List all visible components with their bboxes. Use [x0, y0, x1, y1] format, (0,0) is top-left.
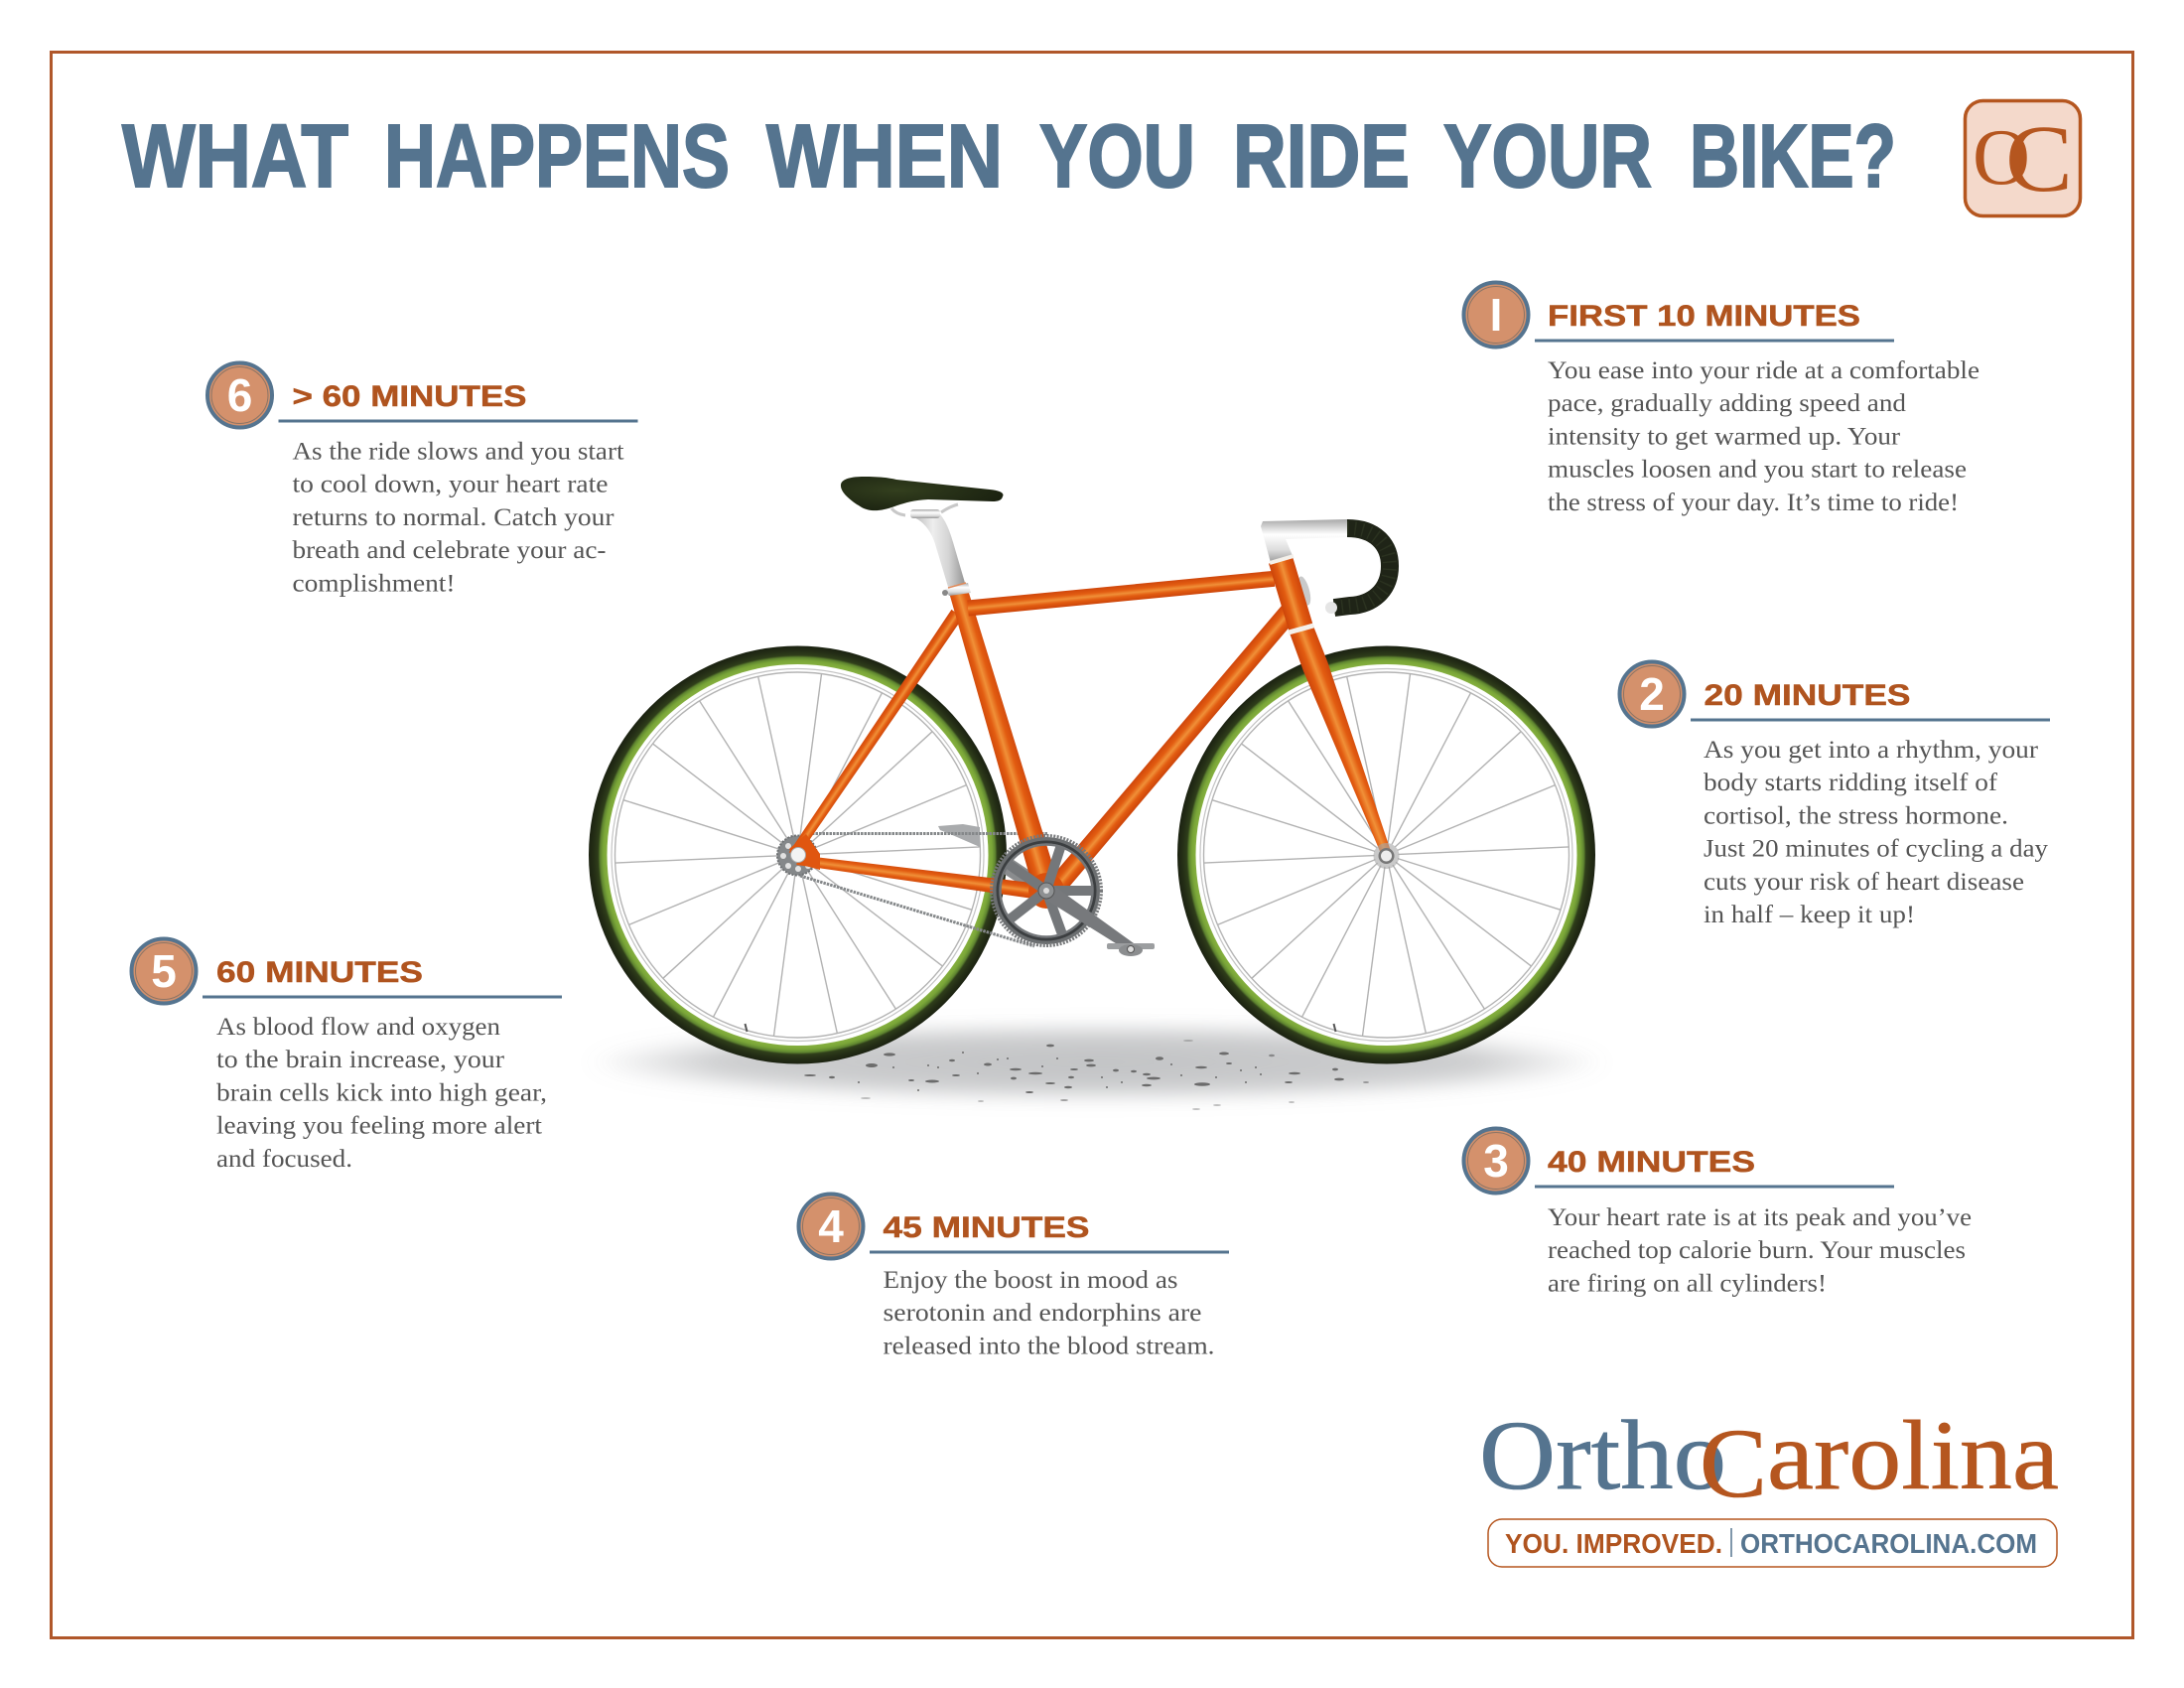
bottom bracket	[1028, 873, 1064, 909]
title: WHAT	[122, 107, 348, 207]
title: BIKE?	[1690, 107, 1896, 207]
chainring	[991, 836, 1102, 945]
body text: to cool down, your heart rate	[292, 472, 608, 498]
panel: step 4	[798, 1194, 1229, 1359]
body text: breath and celebrate your ac-	[292, 537, 606, 564]
heading: 20 MINUTES	[1704, 679, 1910, 712]
body text	[1548, 1204, 1972, 1297]
upper pedal and far crank	[938, 824, 1046, 899]
badge 5: 5	[151, 945, 177, 997]
body text: to the brain increase, your	[216, 1047, 505, 1073]
badge 2: 2	[1639, 668, 1665, 720]
panel: step 1	[1463, 282, 1979, 516]
body text: muscles loosen and you start to release	[1548, 457, 1967, 484]
lower pedal	[1107, 943, 1155, 956]
heading: 60 MINUTES	[216, 956, 423, 989]
body text: body starts ridding itself of	[1704, 770, 1998, 796]
chain	[800, 834, 1047, 946]
tagline pill: YOU. IMPROVED.	[1505, 1528, 1722, 1559]
frame: head tube	[1269, 556, 1313, 633]
frame: chain stay	[796, 852, 1049, 901]
logo: OC monogram badge: C	[2005, 105, 2073, 211]
ground shadow	[586, 1025, 1608, 1110]
frame: top tube	[967, 571, 1275, 616]
panel: step 6	[207, 363, 637, 597]
panel: step 5	[131, 939, 562, 1173]
body text: and focused.	[216, 1146, 352, 1173]
saddle	[841, 477, 1003, 510]
seat post	[911, 514, 965, 587]
body text: You ease into your ride at a comfortable	[1548, 357, 1979, 384]
badge 1	[1463, 282, 1529, 348]
heading: FIRST 10 MINUTES	[1548, 300, 1860, 333]
body text: Just 20 minutes of cycling a day	[1704, 836, 2049, 863]
heading: > 60 MINUTES	[292, 380, 526, 413]
badge 2	[1620, 661, 1684, 727]
body text: intensity to get warmed up. Your	[1548, 423, 1901, 450]
saddle rails	[891, 504, 958, 515]
title: YOU	[1039, 107, 1195, 207]
logo: OC monogram badge: O	[1973, 114, 2030, 202]
head tube collar	[1270, 556, 1294, 563]
heading: 45 MINUTES	[884, 1211, 1090, 1244]
body text: cortisol, the stress hormone.	[1704, 802, 2008, 829]
tagline pill	[1488, 1519, 2057, 1567]
body text: As blood flow and oxygen	[216, 1014, 501, 1041]
rear axle	[790, 848, 806, 862]
seat collar	[942, 583, 971, 596]
body text: are firing on all cylinders!	[1548, 1270, 1827, 1297]
title	[122, 107, 1896, 207]
body text: in half – keep it up!	[1704, 902, 1915, 928]
frame: seat tube	[947, 589, 1059, 895]
body text	[884, 1267, 1215, 1359]
body text: As the ride slows and you start	[292, 439, 624, 465]
tagline pill: ORTHOCAROLINA.COM	[1740, 1528, 2037, 1559]
panel: step 2	[1620, 661, 2050, 928]
handlebar tape	[1325, 528, 1390, 614]
body text: released into the blood stream.	[884, 1333, 1215, 1359]
logo: OrthoCarolina wordmark: arolina	[1767, 1400, 2059, 1510]
badge 3: 3	[1483, 1135, 1509, 1187]
stem and handlebar	[1261, 519, 1347, 563]
body text: Your heart rate is at its peak and you’ve	[1548, 1204, 1972, 1231]
body text	[1548, 357, 1979, 516]
rear wheel	[589, 645, 1007, 1064]
body text: cuts your risk of heart disease	[1704, 869, 2024, 896]
seat clamp	[910, 509, 940, 518]
bicycle	[589, 477, 1595, 1064]
crank bolt	[1038, 883, 1054, 899]
badge 4	[798, 1194, 864, 1259]
title: WHEN	[766, 107, 1003, 207]
title: YOUR	[1443, 107, 1652, 207]
body text: serotonin and endorphins are	[884, 1300, 1201, 1327]
logo: OrthoCarolina wordmark	[1479, 1400, 2059, 1518]
body text	[292, 439, 624, 597]
logo: OrthoCarolina wordmark: C	[1700, 1408, 1767, 1518]
heading: 40 MINUTES	[1548, 1146, 1755, 1179]
fork crown	[1289, 626, 1313, 633]
fork	[1290, 625, 1399, 860]
body text: complishment!	[292, 570, 455, 597]
front hub	[1374, 843, 1400, 869]
badge 1: I	[1490, 289, 1502, 341]
panel: step 3	[1463, 1128, 1972, 1297]
frame: down tube	[1048, 599, 1302, 893]
title: RIDE	[1233, 107, 1410, 207]
frame: seat stay	[787, 610, 963, 859]
crank arm	[1047, 887, 1134, 945]
title: HAPPENS	[384, 107, 730, 207]
body text: brain cells kick into high gear,	[216, 1079, 547, 1106]
rear dropout	[789, 834, 820, 870]
badge 5	[131, 939, 197, 1003]
brake	[1296, 575, 1313, 607]
body text: pace, gradually adding speed and	[1548, 390, 1907, 417]
logo: OC monogram badge	[1966, 101, 2081, 216]
body text	[1704, 737, 2049, 928]
badge 6	[207, 363, 272, 427]
badge 4: 4	[818, 1200, 844, 1252]
body text: the stress of your day. It’s time to ride!	[1548, 490, 1959, 516]
front wheel	[1177, 645, 1595, 1064]
body text: reached top calorie burn. Your muscles	[1548, 1237, 1966, 1264]
body text	[216, 1014, 547, 1173]
logo: OrthoCarolina wordmark: Ortho	[1479, 1400, 1726, 1510]
badge 3	[1463, 1128, 1529, 1194]
body text: returns to normal. Catch your	[292, 504, 614, 531]
body text: Enjoy the boost in mood as	[884, 1267, 1177, 1294]
badge 6: 6	[227, 369, 252, 421]
body text: As you get into a rhythm, your	[1704, 737, 2039, 764]
rear cog	[777, 836, 817, 876]
body text: leaving you feeling more alert	[216, 1113, 542, 1140]
